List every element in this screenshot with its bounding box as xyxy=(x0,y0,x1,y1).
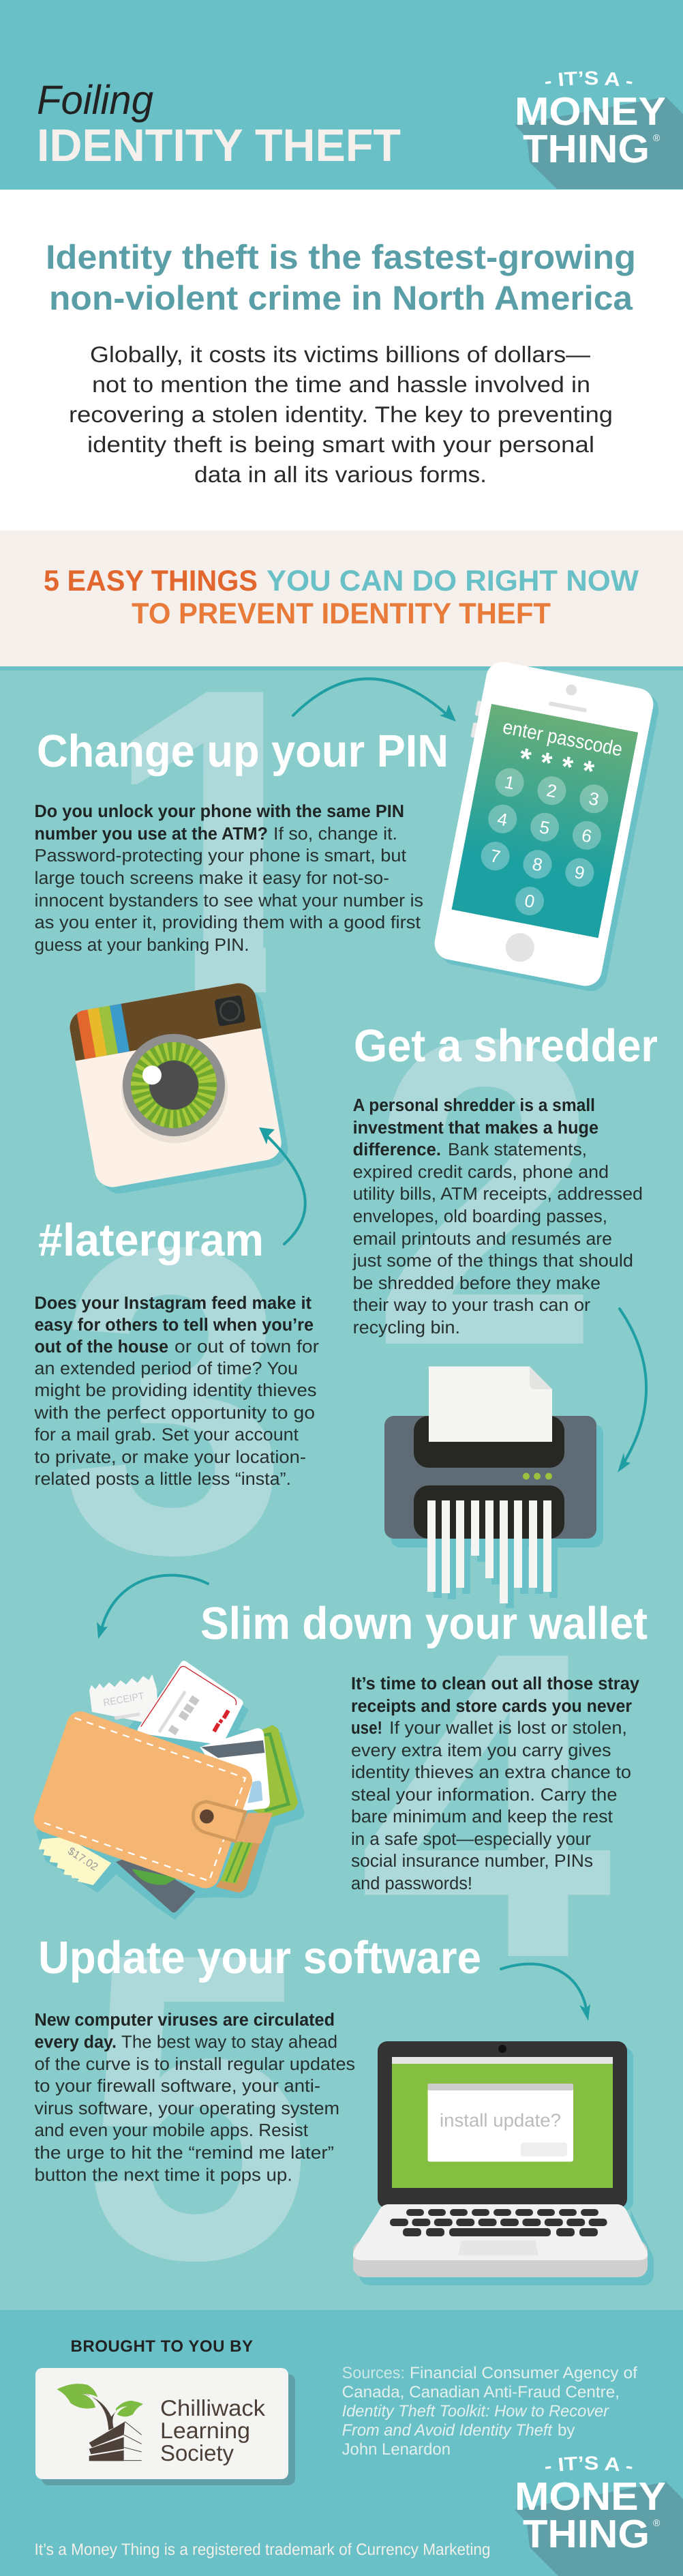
icon: smartphone: 9 xyxy=(573,861,586,883)
body text: If so, change it. xyxy=(273,823,397,844)
section 2: get a shredder xyxy=(352,1020,658,1608)
footer logo: It's a Money Thing: THING xyxy=(523,2512,650,2556)
icon: smartphone: 4 xyxy=(496,808,509,830)
icon: wallet xyxy=(30,1664,305,1920)
body text: virus software, your operating system xyxy=(34,2098,339,2118)
body text: to your firewall software, your anti- xyxy=(34,2075,320,2096)
body text: difference. xyxy=(353,1139,441,1159)
body text: Bank statements, xyxy=(448,1139,587,1159)
trademark line: It’s a Money Thing is a registered trademark of Currency Marketing xyxy=(34,2541,491,2559)
title: Identity Theft: IDENTITY THEFT xyxy=(37,120,401,171)
icon: paper shredder xyxy=(384,1367,603,1608)
body text: as you enter it, providing them with a good first xyxy=(34,912,421,932)
body text: investment that makes a huge xyxy=(353,1117,598,1138)
sources text: by xyxy=(558,2421,575,2440)
body text: just some of the things that should xyxy=(352,1250,633,1271)
body text: Does your Instagram feed make it xyxy=(34,1292,312,1313)
intro headline: Identity theft is the fastest-growing xyxy=(46,238,636,276)
section 4: slim down your wallet xyxy=(30,1575,648,1920)
arrow to laptop xyxy=(501,1964,590,2021)
body text: for a mail grab. Set your account xyxy=(34,1424,299,1445)
icon: smartphone xyxy=(427,658,662,994)
body text: and even your mobile apps. Resist xyxy=(34,2120,309,2140)
arrow to shredder xyxy=(618,1309,646,1472)
body text: expired credit cards, phone and xyxy=(353,1161,609,1182)
body text: the urge to hit the “remind me later” xyxy=(34,2142,334,2163)
arrow to wallet xyxy=(97,1575,208,1639)
body text: related posts a little less “insta”. xyxy=(34,1468,291,1489)
footer logo: It's a Money Thing xyxy=(515,2456,683,2576)
footer logo: It's a Money Thing: - IT’S A - xyxy=(545,2456,633,2472)
background numeral 4: 4 xyxy=(358,1561,616,2049)
body text: social insurance number, PINs xyxy=(351,1850,593,1871)
sources text: From and Avoid Identity Theft xyxy=(342,2421,553,2440)
icon: smartphone: 7 xyxy=(489,845,502,867)
body text xyxy=(34,2009,355,2185)
intro paragraph xyxy=(69,342,613,487)
background numeral 5: 5 xyxy=(82,1863,312,2350)
sources text xyxy=(342,2364,637,2459)
background numeral 1: 1 xyxy=(102,597,344,1085)
banner heading: 5 EASY THINGS xyxy=(44,565,258,597)
icon: smartphone: **** xyxy=(517,741,607,789)
heading: Get a shredder xyxy=(354,1020,658,1071)
sources text: Sources: xyxy=(342,2364,405,2382)
sources text: John Lenardon xyxy=(342,2440,451,2459)
heading: #latergram xyxy=(38,1215,264,1266)
icon: instagram camera xyxy=(67,979,291,1197)
body text: be shredded before they make xyxy=(353,1273,601,1293)
body text xyxy=(34,801,423,955)
banner heading xyxy=(44,565,639,630)
body text: If your wallet is lost or stolen, xyxy=(389,1717,627,1738)
header panel xyxy=(0,0,683,190)
sources text: Financial Consumer Agency of xyxy=(410,2364,637,2382)
body text: innocent bystanders to see what your number is xyxy=(34,890,423,911)
body text: or out of town for xyxy=(174,1336,319,1357)
icon: smartphone: enter passcode xyxy=(501,716,624,761)
sponsor name: Society xyxy=(160,2440,234,2466)
intro paragraph: identity theft is being smart with your personal xyxy=(87,432,594,457)
body text: It’s time to clean out all those stray xyxy=(351,1673,640,1693)
intro headline: non-violent crime in North America xyxy=(49,279,633,317)
sponsor name: Learning xyxy=(160,2418,250,2443)
body text: and passwords! xyxy=(351,1873,472,1893)
body text: bare minimum and keep the rest xyxy=(351,1806,613,1826)
intro paragraph: data in all its various forms. xyxy=(194,462,487,487)
body text xyxy=(351,1673,640,1893)
heading: Slim down your wallet xyxy=(200,1598,648,1649)
main background xyxy=(0,666,683,2310)
background numeral 2: 2 xyxy=(371,949,600,1436)
intro paragraph: recovering a stolen identity. The key to preventing xyxy=(69,402,613,427)
intro panel xyxy=(0,190,683,531)
body text: A personal shredder is a small xyxy=(353,1095,595,1115)
body text: out of the house xyxy=(34,1336,168,1357)
icon: laptop: install update? xyxy=(440,2110,561,2131)
logo: It's a Money Thing xyxy=(515,71,683,189)
body text: utility bills, ATM receipts, addressed xyxy=(353,1183,643,1204)
body text: might be providing identity thieves xyxy=(34,1380,316,1400)
body text: large touch screens make it easy for not-so- xyxy=(34,868,389,888)
body text: Password-protecting your phone is smart, but xyxy=(34,845,407,865)
body text: with the perfect opportunity to go xyxy=(33,1402,315,1423)
body text xyxy=(352,1095,643,1337)
banner heading: YOU CAN DO RIGHT NOW xyxy=(267,565,639,597)
icon: smartphone: 2 xyxy=(545,780,558,801)
sponsor name xyxy=(160,2395,266,2466)
sponsor label: BROUGHT TO YOU BY xyxy=(71,2337,253,2356)
section 3: latergram xyxy=(33,979,319,1489)
icon: laptop xyxy=(353,2041,654,2285)
logo: It's a Money Thing: - IT’S A - xyxy=(545,71,633,86)
body text: guess at your banking PIN. xyxy=(34,934,249,955)
body text: email printouts and resumés are xyxy=(353,1228,612,1249)
icon: smartphone: 0 xyxy=(523,890,536,912)
body text: to private, or make your location- xyxy=(34,1447,306,1467)
body text: in a safe spot—especially your xyxy=(351,1829,591,1849)
icon: wallet: RECEIPT xyxy=(102,1690,145,1708)
heading: Change up your PIN xyxy=(37,726,449,777)
body text: every extra item you carry gives xyxy=(351,1740,611,1760)
sponsor logo: plant and books xyxy=(57,2384,143,2461)
body text: receipts and store cards you never xyxy=(351,1696,632,1716)
arrow to instagram camera xyxy=(259,1127,305,1244)
background numeral 3: 3 xyxy=(58,1157,288,1644)
intro paragraph: not to mention the time and hassle involved in xyxy=(92,372,590,397)
icon: smartphone: 6 xyxy=(580,825,594,846)
body text: of the curve is to install regular updates xyxy=(34,2054,355,2074)
body text: button the next time it pops up. xyxy=(34,2165,292,2185)
sponsor name: Chilliwack xyxy=(160,2395,266,2420)
banner panel xyxy=(0,531,683,666)
section 1: change up your PIN xyxy=(34,658,662,994)
sources text: Identity Theft Toolkit: How to Recover xyxy=(342,2402,609,2420)
banner heading: TO PREVENT IDENTITY THEFT xyxy=(132,597,551,630)
logo: It's a Money Thing: THING xyxy=(523,127,650,171)
body text: their way to your trash can or xyxy=(353,1294,590,1315)
section 5: update your software xyxy=(34,1932,654,2285)
body text: The best way to stay ahead xyxy=(121,2031,337,2052)
icon: smartphone: 3 xyxy=(587,788,601,810)
body text: an extended period of time? You xyxy=(34,1358,298,1378)
body text: use! xyxy=(351,1717,382,1738)
body text: New computer viruses are circulated xyxy=(34,2009,335,2030)
icon: wallet: $17.02 xyxy=(65,1845,100,1873)
intro paragraph: Globally, it costs its victims billions of dollars— xyxy=(90,342,590,367)
icon: smartphone: 8 xyxy=(531,853,544,875)
heading: Update your software xyxy=(38,1932,481,1983)
body text: easy for others to tell when you’re xyxy=(34,1314,314,1335)
body text: identity thieves an extra chance to xyxy=(351,1762,631,1782)
icon: smartphone: 1 xyxy=(503,771,517,793)
footer panel xyxy=(0,2310,683,2576)
body text: envelopes, old boarding passes, xyxy=(353,1206,607,1226)
footer logo: It's a Money Thing: ® xyxy=(653,2517,661,2528)
icon: smartphone: 5 xyxy=(538,816,551,838)
sources text: Canada, Canadian Anti-Fraud Centre, xyxy=(342,2383,620,2401)
sponsor card xyxy=(35,2368,295,2485)
logo: It's a Money Thing: ® xyxy=(653,132,661,143)
body text: number you use at the ATM? xyxy=(34,823,268,844)
body text: Do you unlock your phone with the same PIN xyxy=(34,801,404,821)
body text xyxy=(33,1292,319,1489)
body text: every day. xyxy=(34,2031,117,2052)
arrow to phone xyxy=(293,679,456,722)
body text: steal your information. Carry the xyxy=(351,1784,618,1805)
body text: recycling bin. xyxy=(353,1317,460,1337)
footer logo: It's a Money Thing: MONEY xyxy=(515,2474,666,2519)
intro headline xyxy=(46,238,636,317)
logo: It's a Money Thing: MONEY xyxy=(515,89,666,134)
title: Foiling: Foiling xyxy=(37,77,153,123)
